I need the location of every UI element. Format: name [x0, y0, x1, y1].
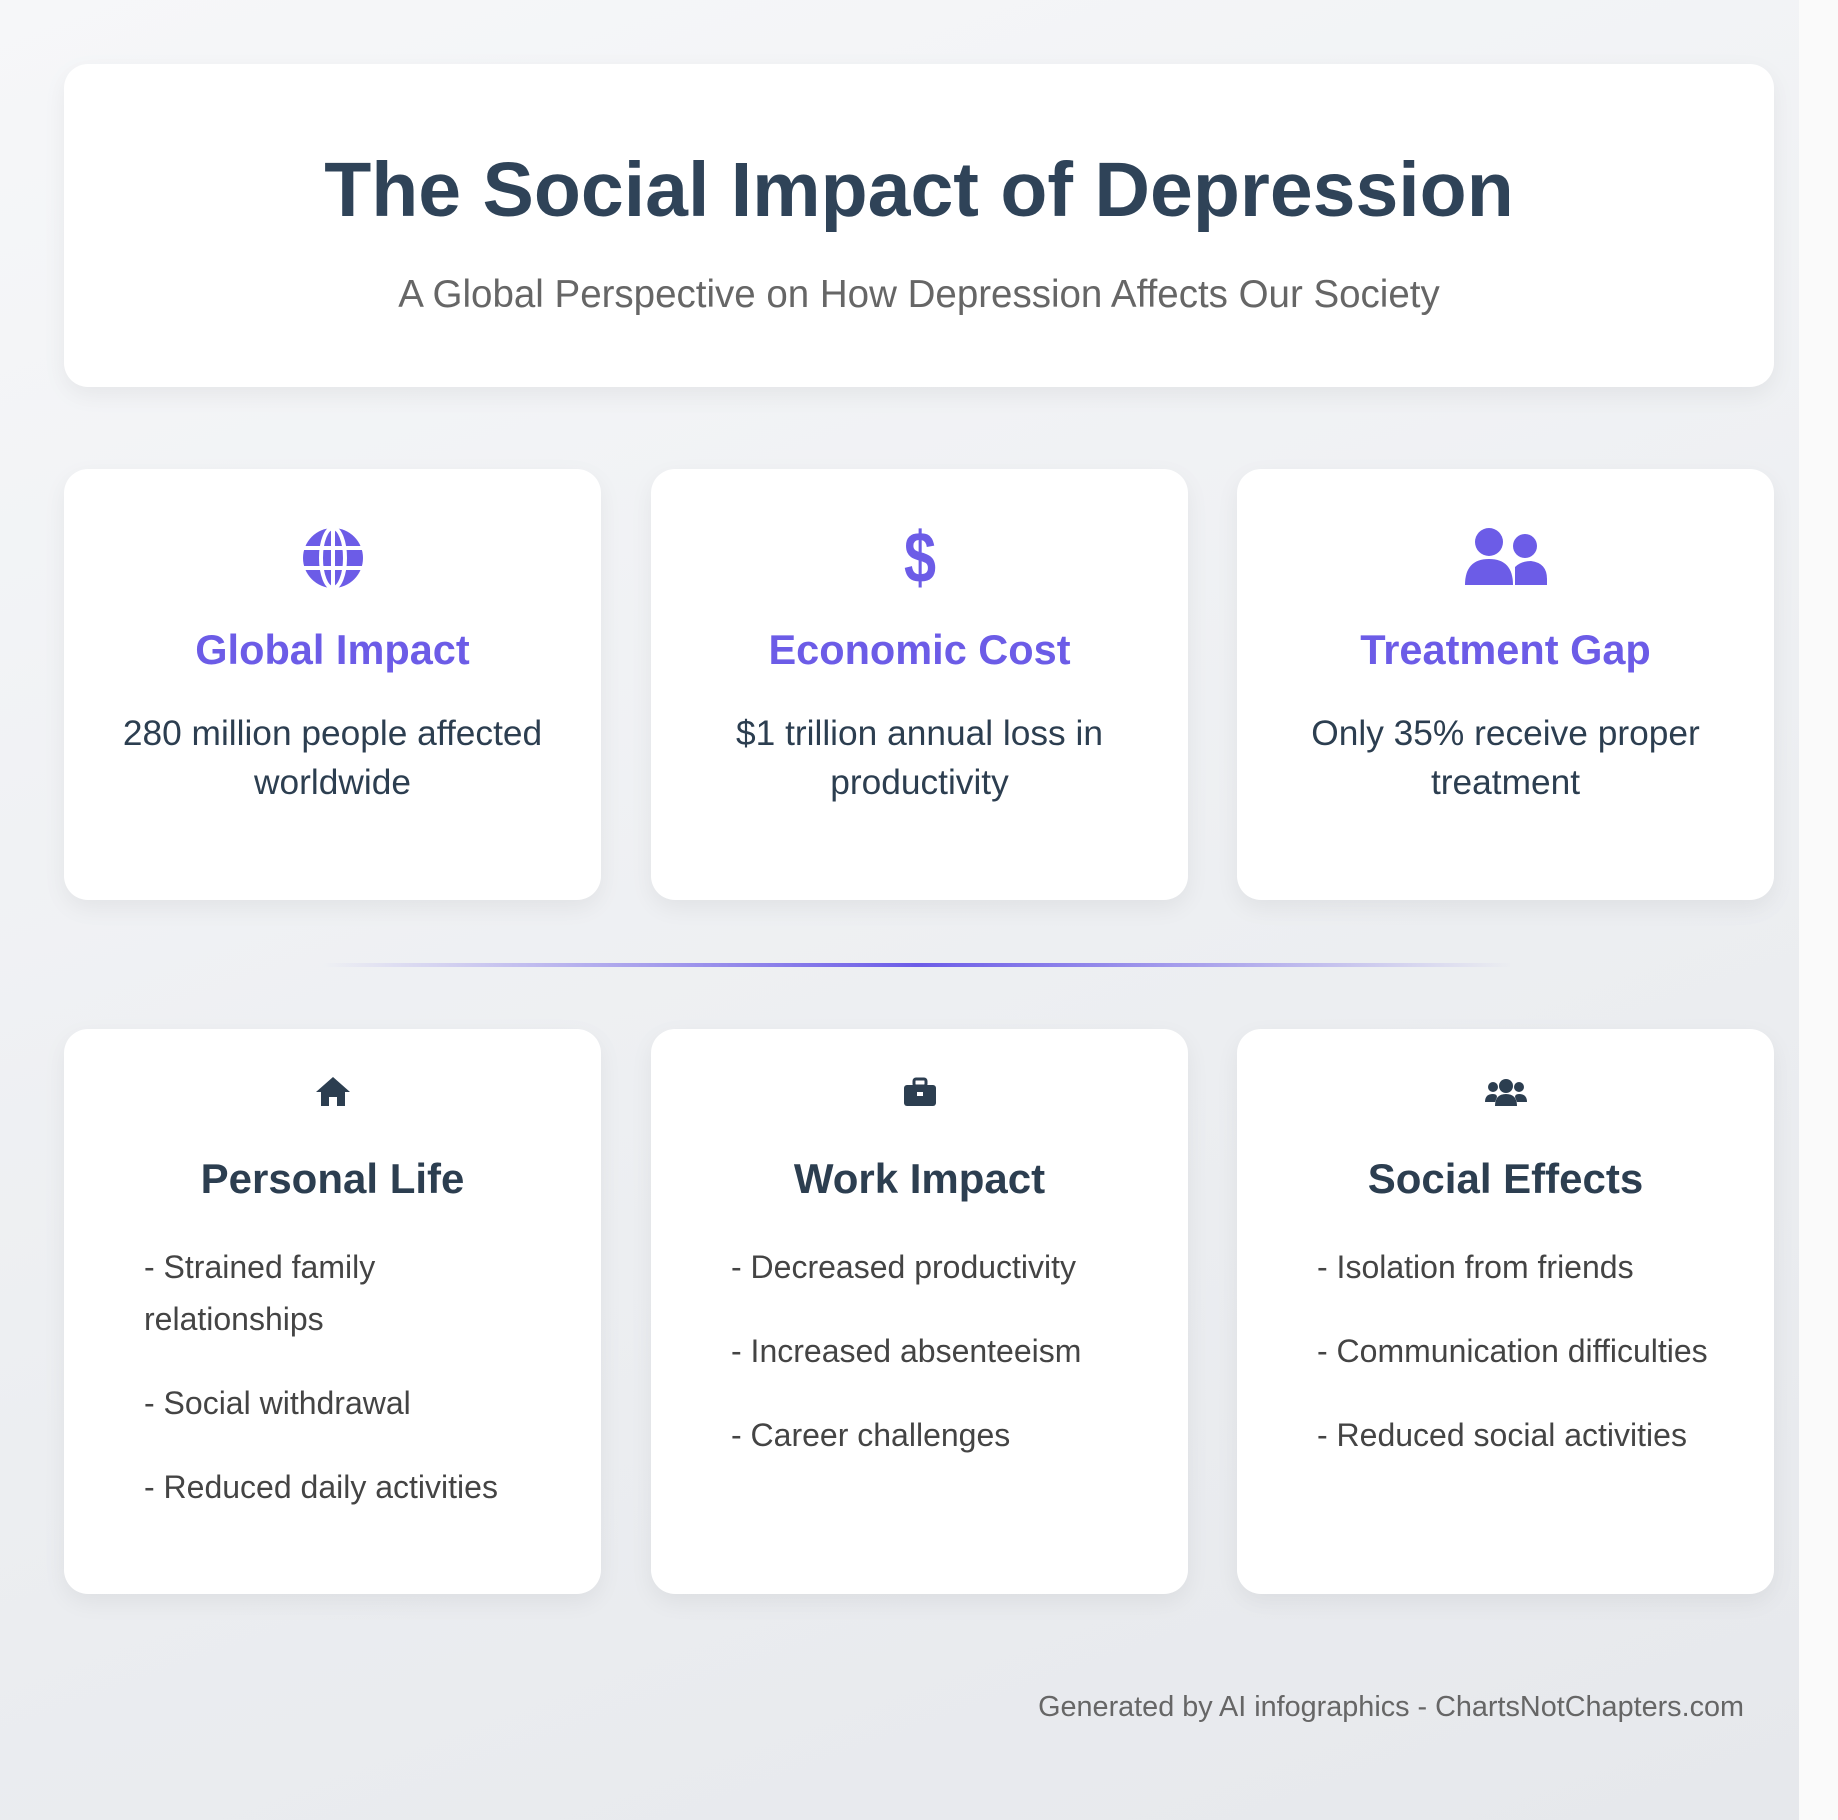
list — [1317, 1249, 1708, 1453]
icon: globe — [303, 528, 363, 588]
list: - Decreased productivity — [731, 1249, 1076, 1285]
list: - Increased absenteeism — [731, 1333, 1081, 1369]
header card — [64, 64, 1774, 387]
icon: group — [1485, 1079, 1527, 1106]
icon: briefcase — [904, 1078, 936, 1106]
list: - Reduced social activities — [1317, 1417, 1687, 1453]
heading: Personal Life — [201, 1155, 464, 1202]
text: $1 trillion annual loss in productivity — [736, 714, 1103, 802]
list: - Career challenges — [731, 1417, 1010, 1453]
heading: Treatment Gap — [1360, 626, 1651, 673]
list: - Social withdrawal — [144, 1385, 411, 1421]
panel: economic cost — [651, 469, 1188, 900]
list: - Isolation from friends — [1317, 1249, 1634, 1285]
icon: users — [1465, 528, 1547, 585]
heading: Social Effects — [1368, 1155, 1643, 1202]
list — [144, 1249, 498, 1505]
list: - Reduced daily activities — [144, 1469, 498, 1505]
heading: Economic Cost — [768, 626, 1071, 673]
panel: personal life — [64, 1029, 601, 1594]
heading: Global Impact — [195, 626, 470, 673]
panel: work impact — [651, 1029, 1188, 1594]
heading: Work Impact — [794, 1155, 1045, 1202]
list — [731, 1249, 1081, 1453]
text: 280 million people affected worldwide — [123, 714, 542, 802]
icon: house — [316, 1077, 350, 1106]
text: Only 35% receive proper treatment — [1311, 714, 1700, 802]
title: The Social Impact of Depression — [324, 147, 1514, 233]
list: - Strained family relationships — [144, 1249, 375, 1337]
panel: treatment gap — [1237, 469, 1774, 900]
panel: social effects — [1237, 1029, 1774, 1594]
subtitle: A Global Perspective on How Depression Affects Our Society — [398, 273, 1440, 316]
footer: Generated by AI infographics - ChartsNotChapters.com — [1038, 1691, 1744, 1723]
list: - Communication difficulties — [1317, 1333, 1708, 1369]
panel: global impact — [64, 469, 601, 900]
